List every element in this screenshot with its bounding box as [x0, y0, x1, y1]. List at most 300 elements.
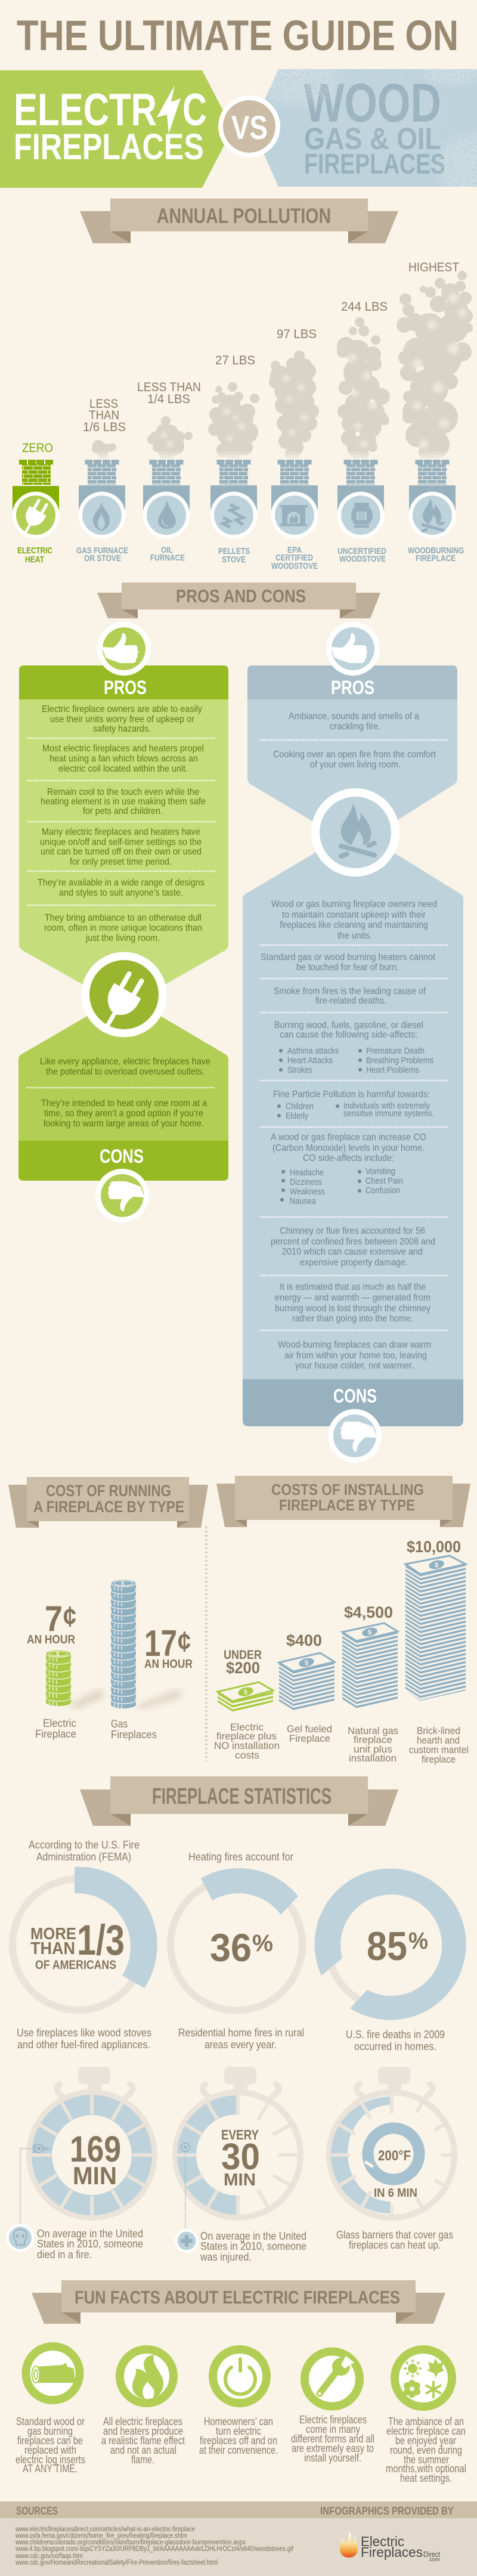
text: wood cons list: burning wood is lost through the chimney: [275, 1304, 430, 1314]
fun fact: log inserts: [16, 2346, 85, 2475]
footer: [0, 2501, 477, 2576]
bulleted lists: Asthma attacks: [287, 1046, 339, 1056]
bulleted lists: Heart Problems: [366, 1065, 419, 1075]
bulleted lists: Weakness: [290, 1187, 325, 1197]
speckled texture: [265, 69, 477, 187]
bulleted lists: sensitive immune systems.: [343, 1109, 434, 1119]
fireplace type labels: UNCERTIFIED: [337, 546, 386, 556]
heading: sources: SOURCES: [16, 2505, 58, 2517]
cash stack: 10000: $: [435, 1562, 438, 1569]
icon: plug badge: [81, 952, 167, 1038]
text: electric cons list: the potential to overload overused outlets.: [46, 1067, 205, 1077]
coin stack: gas 17 cents: $: [121, 1581, 125, 1587]
heading: pros: PROS: [104, 677, 147, 698]
text: electric pros list: for only preset time period.: [70, 857, 172, 867]
icon: stove: [351, 503, 373, 528]
heading: A FIREPLACE BY TYPE: [33, 1498, 184, 1516]
icon: flame: [120, 2349, 174, 2403]
icon: pellets: [223, 504, 243, 527]
fun fact: easy to install: [291, 2352, 374, 2464]
label: 17 cents: ¢: [178, 1626, 191, 1658]
text: wood cons list: expensive property damage.: [300, 1258, 408, 1268]
chimney: uncertified woodstove: [337, 460, 384, 539]
text: electric pros list: safety hazards.: [93, 724, 151, 734]
text: electric pros list: heat using a fan which blows across an: [49, 754, 198, 764]
chimney: woodburning fireplace: [409, 460, 456, 539]
text: wood cons list: your house colder, not warmer.: [295, 1361, 414, 1371]
text: wood cons list: 2010 which can cause extensive and: [282, 1247, 423, 1257]
caption: fireplaces can heat up.: [349, 2239, 441, 2251]
pollution amounts: 1/6 LBS: [83, 420, 126, 434]
vs badge: VS: [231, 109, 268, 146]
heading: FIREPLACE STATISTICS: [152, 1784, 332, 1809]
label: 17 cents: AN HOUR: [144, 1658, 193, 1671]
logo: Fireplaces: [361, 2544, 423, 2560]
cash stack: 400: $: [305, 1659, 308, 1667]
bulleted lists: Nausea: [290, 1196, 317, 1206]
heading: ANNUAL POLLUTION: [157, 205, 331, 228]
number: EVERY: [221, 2127, 259, 2142]
big number: 85: [367, 1924, 407, 1969]
label: 7 cents: AN HOUR: [27, 1633, 75, 1646]
caption: Residential home fires in rural: [178, 2027, 304, 2039]
text: wood cons list: air from within your home too, leaving: [284, 1351, 427, 1361]
stopwatch: 169 min: [6, 2067, 154, 2261]
heading: COSTS OF INSTALLING: [271, 1481, 424, 1498]
intro text: According to the U.S. Fire: [29, 1839, 140, 1851]
text: a realistic flame effect: [101, 2435, 185, 2447]
caption: and other fuel-fired appliances.: [17, 2039, 150, 2051]
pollution amounts: 1/4 LBS: [147, 392, 190, 406]
cash stack: 4500: $: [368, 1629, 371, 1636]
logo: Direct: [423, 2550, 440, 2559]
stopwatch: 200 degrees in 6 min: [329, 2067, 454, 2251]
number: 169: [70, 2129, 121, 2169]
heading: cons: CONS: [333, 1385, 377, 1407]
source list: www.usfa.fema.gov/citizens/home_fire_prev/heating/fireplace.shtm: [15, 2532, 187, 2540]
coin stack: electric 7 cents: [46, 1650, 71, 1706]
number: 30: [221, 2137, 260, 2178]
source list: www.childrenscolorado.org/conditions/skin/burn/fireplace-glassdoor-burnprevention.aspx: [15, 2539, 246, 2546]
pollution amounts: 97 LBS: [277, 327, 317, 341]
donut chart: [315, 1869, 466, 2020]
text: [199, 2416, 278, 2456]
icon: four seasons: [395, 2349, 452, 2407]
chimney: pellets stove: [210, 460, 258, 539]
ribbon: cost of running: [8, 1477, 208, 1528]
fireplace type labels: OR STOVE: [84, 553, 121, 564]
fireplace type labels: WOODSTOVE: [271, 561, 318, 571]
text: gas burning: [27, 2425, 73, 2437]
heading: electric: C: [182, 85, 207, 135]
caption: [346, 2029, 445, 2052]
pollution amounts: 27 LBS: [215, 354, 255, 367]
cost captions: fireplace: [422, 1754, 456, 1765]
text: the summer: [404, 2454, 449, 2466]
text: AT ANY TIME.: [23, 2463, 78, 2475]
smoke: gas furnace: [92, 440, 116, 460]
big number: MORE: [30, 1924, 76, 1943]
source list: www.cdc.gov/HomeandRecreationalSafety/Fire-Prevention/fires-factsheet.html: [15, 2559, 218, 2566]
icon: log: [26, 2346, 80, 2400]
text: [386, 2416, 466, 2484]
fireplace type labels: GAS FURNACE: [76, 546, 128, 556]
bulleted lists: Individuals with extremely: [343, 1101, 430, 1111]
chimney: electric heat: [12, 460, 60, 540]
coin stack: gas 17 cents: [111, 1580, 136, 1708]
text: wood cons list: Wood or gas burning fireplace owners need: [271, 899, 437, 909]
icon: fireplace: [280, 505, 308, 526]
cost amounts: $10,000: [407, 1538, 461, 1556]
bulleted lists: Strokes: [287, 1065, 312, 1075]
cost captions: custom mantel: [409, 1744, 469, 1755]
text: electric pros list: [38, 704, 206, 943]
text: wood cons list: can cause the following side-affects:: [280, 1030, 417, 1040]
heading: fireplaces: FIREPLACES: [14, 126, 204, 167]
fireplace type labels: PELLETS: [218, 546, 250, 556]
text: different forms and all: [291, 2433, 374, 2445]
text: All electric fireplaces: [103, 2416, 182, 2428]
smoke: epa certified woodstove: [269, 351, 319, 462]
source list: www.electricfireplacesdirect.com/articles/what-is-an-electric-fireplace: [15, 2526, 195, 2533]
pollution amounts: LESS THAN: [137, 380, 201, 394]
text: wood pros list: Ambiance, sounds and smells of a: [289, 711, 419, 722]
cost captions: Natural gas: [348, 1725, 398, 1736]
icon: thumbs down: [328, 1409, 382, 1463]
text: wood cons list: It is estimated that as much as half the: [280, 1282, 426, 1292]
cost captions: fireplace: [354, 1734, 392, 1745]
fireplace type labels: ELECTRIC: [17, 546, 52, 556]
text: wood cons list: Fine Particle Pollution is harmful towards:: [273, 1089, 430, 1100]
caption: [200, 2230, 306, 2263]
caption: [17, 2027, 151, 2051]
cash stack: 10000: [405, 1556, 466, 1701]
chimney: epa certified woodstove: [271, 460, 318, 539]
pollution amounts: 244 LBS: [341, 300, 388, 314]
heading: PROS AND CONS: [176, 586, 306, 606]
text: heat settings.: [400, 2472, 452, 2484]
big number: %: [408, 1928, 428, 1954]
icon: medical cross: [175, 2229, 199, 2253]
pollution amounts: [22, 261, 459, 455]
pollution amounts: ZERO: [22, 441, 53, 455]
cash stack: 4500: [342, 1623, 398, 1708]
text: electric cons list: looking to warm large areas of your home.: [44, 1119, 204, 1129]
text: wood cons list: percent of confined fires between 2008 and: [271, 1237, 435, 1247]
icon: fire badge: [311, 788, 399, 877]
fireplace type labels: WOODBURNING: [408, 546, 464, 556]
banner: wood gas and oil fireplaces: [264, 69, 477, 187]
heading: [33, 1482, 184, 1516]
cost captions: Brick-lined: [417, 1725, 460, 1736]
text: wood cons list: Burning wood, fuels, gasoline, or diesel: [274, 1020, 423, 1030]
text: wood pros list: Cooking over an open fire from the comfort: [273, 750, 436, 760]
icon: wood fire: [423, 499, 444, 531]
temperature ring: [365, 2128, 419, 2179]
text: replaced with: [24, 2444, 76, 2456]
heading: infographics provided by: INFOGRAPHICS PROVIDED BY: [320, 2505, 454, 2517]
icon: plug: [16, 496, 52, 540]
text: are extremely easy to: [292, 2442, 374, 2454]
cost captions: fireplace plus: [216, 1730, 277, 1742]
text: [101, 2416, 185, 2466]
bulleted lists: Breathing Problems: [366, 1055, 433, 1066]
cost captions: Electric: [230, 1722, 264, 1733]
smoke: oil furnace: [147, 416, 193, 460]
cost amounts: UNDER: [224, 1648, 262, 1662]
pollution amounts: HIGHEST: [408, 261, 459, 274]
text: install yourself.: [304, 2452, 361, 2464]
fun fact: year round: [386, 2349, 466, 2484]
caption: [178, 2027, 304, 2051]
cost captions: hearth and: [417, 1735, 460, 1746]
cost amounts: [224, 1538, 461, 1677]
text: Homeowners’ can: [204, 2416, 273, 2428]
text: wood cons list: Chimney or flue fires accounted for 56: [280, 1226, 425, 1236]
chart: coin stacks running cost: [27, 1580, 193, 1741]
text: [16, 2416, 85, 2475]
bulleted lists: Confusion: [366, 1185, 400, 1196]
text: electric pros list: Most electric fireplaces and heaters propel: [42, 744, 204, 754]
heading: cons: CONS: [100, 1145, 144, 1167]
text: wood pros list: of your own living room.: [310, 760, 401, 770]
source list: www.4.bp.blogspot.com/-bqxCYSYZa30/URP8DBy1_bI/AAAAAAAAAxk/LDHLHrOCzI4/s640/woodstoves.gif: [15, 2546, 294, 2553]
text: electric pros list: They’re available in a wide range of designs: [38, 878, 205, 888]
fireplace type labels: HEAT: [25, 555, 44, 565]
smoke: uncertified woodstove: [337, 317, 390, 463]
text: electric pros list: room, often in more unique locations than: [44, 923, 202, 933]
fireplace type labels: STOVE: [222, 555, 246, 565]
panel: wood gas oil pros: [247, 622, 457, 847]
bulleted lists: Chest Pain: [366, 1176, 403, 1186]
number: [374, 2148, 417, 2200]
icon: oil drop: [158, 500, 176, 529]
text: fireplaces off and on: [200, 2435, 277, 2447]
caption: [336, 2229, 453, 2251]
icon: thumbs up: [97, 622, 151, 676]
label: 17 cents: 17: [144, 1623, 177, 1664]
banner: electric fireplaces: [0, 70, 233, 188]
text: wood cons list: the units.: [337, 931, 372, 941]
captions: Fireplace: [35, 1728, 76, 1740]
icon: thumbs down: [95, 1169, 149, 1222]
captions: Electric: [43, 1717, 76, 1729]
text: wood cons list: A wood or gas fireplace can increase CO: [271, 1132, 426, 1143]
ribbon: annual pollution: [80, 199, 398, 243]
caption: died in a fire.: [37, 2249, 92, 2261]
bulleted lists: Elderly: [286, 1111, 308, 1121]
text: electric cons list: Like every appliance, electric fireplaces have: [40, 1057, 210, 1067]
icon: wrench: [305, 2352, 360, 2407]
heading: FUN FACTS ABOUT ELECTRIC FIREPLACES: [75, 2287, 400, 2308]
caption: On average in the United: [37, 2228, 143, 2240]
cost amounts: $4,500: [344, 1603, 393, 1621]
intro text: [29, 1839, 140, 1863]
text: wood cons list: fire-related deaths.: [315, 996, 386, 1006]
caption: Glass barriers that cover gas: [336, 2229, 453, 2241]
text: and heaters produce: [103, 2425, 183, 2437]
text: wood cons list: be touched for fear of burn.: [296, 962, 399, 973]
text: turn electric: [216, 2425, 261, 2437]
text: electric pros list: unique on/off and self-timer settings so the: [40, 837, 202, 847]
chimney: oil furnace: [143, 460, 190, 539]
cost captions: unit plus: [354, 1744, 392, 1755]
caption: States in 2010, someone: [37, 2238, 143, 2250]
cost captions: Gel fueled: [287, 1723, 332, 1735]
donut chart: [13, 1867, 157, 2010]
text: electric pros list: use their units worry free of upkeep or: [50, 714, 195, 724]
text: [291, 2414, 374, 2464]
text: electric cons list: [40, 1057, 210, 1129]
caption: U.S. fire deaths in 2009: [346, 2029, 445, 2041]
stat: 85 percent fire deaths: [315, 1869, 466, 2052]
text: wood cons list: Wood-burning fireplaces can draw warm: [278, 1340, 431, 1350]
caption: [37, 2228, 143, 2261]
number: MIN: [73, 2162, 117, 2190]
bulleted lists: Dizziness: [290, 1177, 322, 1187]
text: electric pros list: Remain cool to the touch even while the: [47, 787, 199, 797]
text: Electric fireplaces: [299, 2414, 367, 2426]
number: [221, 2127, 260, 2190]
cost amounts: $400: [286, 1631, 322, 1649]
text: wood cons list: energy — and warmth — generated from: [275, 1293, 430, 1303]
text: electric log inserts: [16, 2454, 85, 2466]
bulleted lists: Headache: [290, 1168, 324, 1178]
ribbon: fun facts: [32, 2280, 445, 2324]
fireplace type labels: WOODSTOVE: [339, 554, 386, 564]
source list: www.cdc.gov/co/faqs.htm: [15, 2553, 83, 2560]
big number: 1/3: [77, 1917, 125, 1964]
heading: electric: ELECTR: [14, 85, 157, 135]
panel: electric pros: [19, 622, 228, 1008]
caption: On average in the United: [200, 2230, 306, 2242]
heading: pros: PROS: [331, 677, 374, 698]
number: [70, 2129, 121, 2190]
heading: COST OF RUNNING: [46, 1482, 171, 1500]
logo: .com: [428, 2556, 440, 2562]
number: MIN: [224, 2171, 256, 2190]
big number: %: [252, 1930, 273, 1956]
text: wood pros list: crackling fire.: [330, 722, 380, 732]
captions: [35, 1717, 157, 1741]
coin shadows: [69, 1689, 182, 1709]
caption: areas every year.: [205, 2039, 277, 2051]
chimney: gas furnace: [79, 460, 125, 539]
text: wood cons list: fireplaces like cleaning and maintaining: [280, 920, 428, 930]
intro text: Administration (FEMA): [36, 1851, 131, 1863]
bulleted lists: Premature Death: [366, 1046, 425, 1056]
ribbon: pros and cons: [97, 583, 380, 618]
donut chart: [171, 1868, 302, 2011]
bulleted lists: Vomiting: [366, 1166, 395, 1176]
cost captions: installation: [349, 1753, 397, 1764]
number: IN 6 MIN: [374, 2187, 417, 2200]
text: electric pros list: heating element is in use making them safe: [41, 797, 206, 807]
smoke highlights: [161, 293, 466, 449]
bulleted lists: Children: [286, 1101, 314, 1111]
text: wood cons list: Standard gas or wood burning heaters cannot: [261, 952, 435, 962]
fireplace type labels: FURNACE: [150, 553, 185, 563]
logo: Electric: [361, 2534, 404, 2549]
text: electric cons list: time, so they aren’t a good option if you’re: [44, 1109, 203, 1119]
text: electric pros list: They bring ambiance to an otherwise dull: [45, 913, 202, 923]
text: wood cons list: (Carbon Monoxide) levels in your home.: [272, 1143, 425, 1153]
fireplace type labels: [17, 545, 464, 571]
cash stack: under 200: [218, 1682, 273, 1713]
stat: 36 percent heating fires: [171, 1851, 304, 2051]
fireplace type labels: CERTIFIED: [275, 553, 313, 563]
text: wood cons list: [261, 899, 437, 1371]
coin stack: electric 7 cents: $: [56, 1651, 60, 1658]
icon: skull: [6, 2224, 35, 2252]
caption: Use fireplaces like wood stoves: [17, 2027, 151, 2039]
fireplace type labels: EPA: [287, 545, 302, 555]
stopwatch: every 30 min: [175, 2067, 306, 2263]
pollution amounts: LESS: [89, 397, 118, 411]
vs badge: [218, 95, 280, 157]
stat: more than one third of americans: [13, 1839, 157, 2051]
label: 7 cents: ¢: [63, 1601, 76, 1633]
captions: Gas: [111, 1718, 128, 1730]
text: at their convenience.: [199, 2444, 278, 2456]
text: electric pros list: Electric fireplace owners are able to easily: [42, 704, 202, 714]
big number: THAN: [30, 1939, 75, 1958]
heading: [271, 1481, 424, 1514]
smoke: pellets stove: [208, 382, 259, 462]
text: fireplaces can be: [17, 2435, 83, 2447]
fireplace type labels: FIREPLACE: [416, 553, 456, 564]
big number: OF AMERICANS: [35, 1958, 116, 1972]
panel: wood gas oil cons: [243, 829, 463, 1463]
smoke plumes: [60, 271, 477, 463]
heading: electric: I: [166, 101, 169, 128]
cost captions: costs: [235, 1750, 259, 1761]
big number: [210, 1925, 273, 1970]
text: wood cons list: CO side-affects include:: [303, 1153, 394, 1163]
cost captions: NO installation: [214, 1740, 280, 1751]
text: wood cons list: to maintain constant upkeep with their: [282, 910, 426, 920]
text: electric pros list: for pets and children.: [83, 806, 163, 816]
heading: FIREPLACE BY TYPE: [279, 1496, 415, 1514]
text: electric pros list: Many electric fireplaces and heaters have: [42, 827, 200, 837]
label: 7 cents: 7: [45, 1599, 63, 1639]
source list: [15, 2526, 294, 2566]
text: be enjoyed year: [395, 2435, 456, 2447]
text: electric pros list: and styles to suit anyone’s taste.: [59, 888, 183, 898]
bulleted lists: Heart Attacks: [287, 1055, 333, 1066]
logo: [340, 2531, 440, 2562]
cash stack: under 200: $: [244, 1689, 247, 1696]
icon: power button: [213, 2349, 267, 2403]
text: round, even during: [390, 2444, 462, 2456]
icon: thumbs up: [326, 622, 380, 676]
big number: [30, 1917, 125, 1972]
cost amounts: $200: [226, 1659, 260, 1677]
text: wood pros list: [273, 711, 436, 770]
text: and not an actual: [110, 2444, 176, 2456]
text: come in many: [306, 2423, 360, 2435]
smoke: woodburning fireplace: [397, 271, 473, 463]
icon: gas flame: [93, 503, 110, 531]
marker: [20, 2144, 43, 2224]
text: flame.: [131, 2454, 154, 2466]
cash stack: 400: [279, 1653, 334, 1710]
text: electric pros list: electric coil located within the unit.: [58, 764, 188, 774]
heading: wood: WOOD: [304, 73, 441, 134]
ribbon: costs of installing: [216, 1476, 470, 1527]
bulleted lists: [277, 1046, 434, 1206]
cost captions: Fireplace: [289, 1733, 330, 1744]
